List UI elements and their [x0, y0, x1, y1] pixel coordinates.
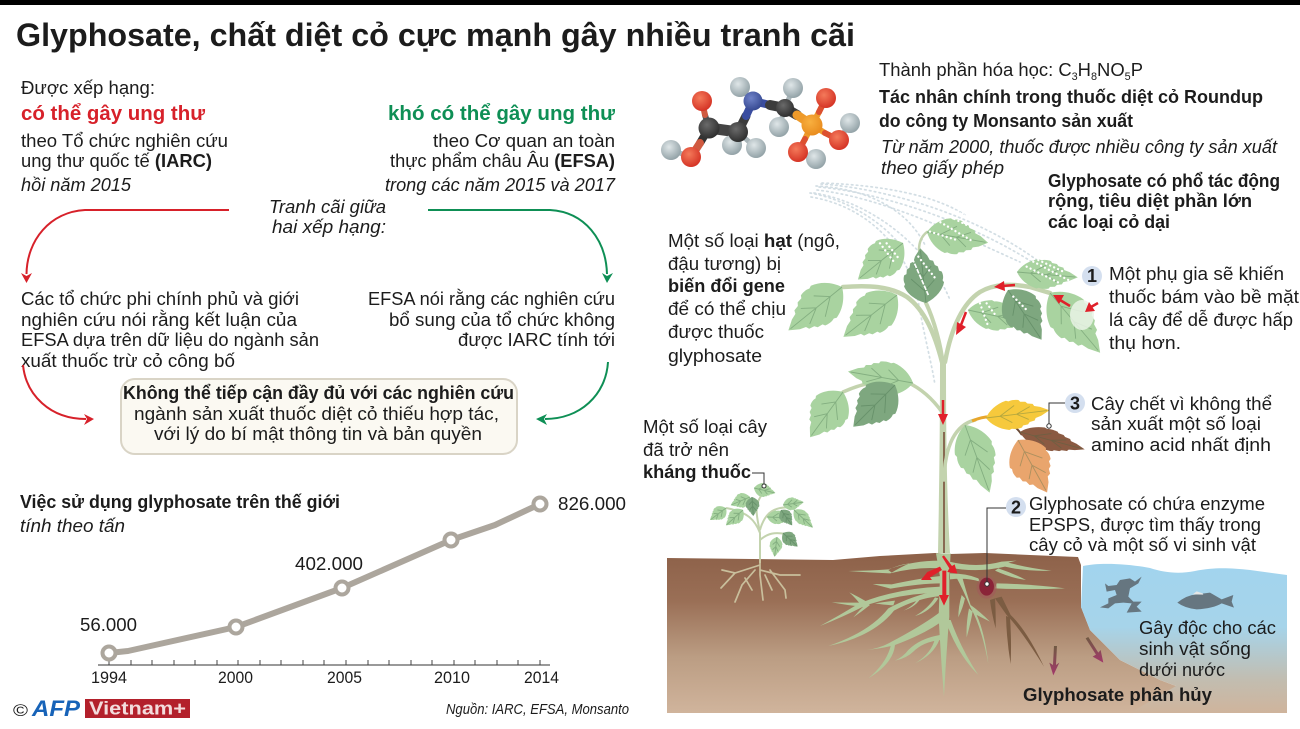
- text: NGO argument: nghiên cứu nói rằng kết luận của: [21, 309, 298, 330]
- spray on leaves: [880, 212, 1068, 327]
- step 3: amino acid nhất định: [1091, 434, 1271, 455]
- step 2: 2: [1011, 498, 1021, 518]
- step 1: lá cây để dễ được hấp: [1109, 309, 1293, 330]
- step 2: [985, 493, 1265, 586]
- line chart: 826.000: [558, 493, 626, 514]
- text: NGO argument: EFSA dựa trên dữ liệu do ngành sản: [21, 329, 319, 350]
- root damage spot: [977, 576, 997, 599]
- text: chemical description: do công ty Monsanto sản xuất: [879, 110, 1133, 131]
- callout box: với lý do bí mật thông tin và bản quyền: [154, 423, 482, 444]
- text: seeds: biến đổi gene: [668, 275, 785, 296]
- text: chemical description: 5: [1125, 71, 1131, 83]
- text: resistant plants: Một số loại cây: [643, 416, 768, 437]
- text: seeds: [668, 230, 840, 366]
- callout box: [121, 379, 517, 454]
- text: chemical description: Tác nhân chính trong thuốc diệt cỏ Roundup: [879, 86, 1263, 107]
- arrow: green to box: [536, 362, 608, 425]
- panel: ranking left: theo Tổ chức nghiên cứu: [21, 130, 228, 151]
- step 3: 3: [1070, 394, 1080, 414]
- fish: [1177, 591, 1234, 609]
- panel: ranking right: thực phẩm châu Âu (EFSA): [390, 150, 615, 171]
- step 1: thuốc bám vào bề mặt: [1109, 286, 1300, 307]
- line chart: 56.000: [80, 614, 137, 635]
- text: seeds: glyphosate: [668, 345, 762, 366]
- text: seeds: được thuốc: [668, 321, 764, 342]
- text: NGO argument: Các tổ chức phi chính phủ và giới: [21, 288, 299, 309]
- footer logos: ©: [13, 701, 29, 720]
- arrow: green to EFSA text: [428, 210, 613, 283]
- step 3: Cây chết vì không thể: [1091, 393, 1272, 414]
- panel: ranking right: trong các năm 2015 và 2017: [385, 174, 616, 195]
- text: decomposition: Glyphosate phân hủy: [1023, 684, 1213, 705]
- line chart: 2010: [434, 669, 470, 687]
- text: EFSA argument: [368, 288, 615, 350]
- text: resistant plants: kháng thuốc: [643, 461, 751, 482]
- red arrows: translocation: [921, 281, 1098, 606]
- text: broad spectrum: các loại cỏ dại: [1048, 211, 1170, 232]
- text: seeds: đậu tương) bị: [668, 253, 781, 274]
- controversy label: [269, 196, 386, 237]
- text: EFSA argument: được IARC tính tới: [458, 329, 615, 350]
- text: chemical description: Từ năm 2000, thuốc được nhiều công ty sản xuất: [881, 136, 1278, 157]
- text: EFSA argument: EFSA nói rằng các nghiên cứu: [368, 288, 615, 309]
- text: NGO argument: xuất thuốc trừ cỏ công bố: [21, 350, 236, 371]
- droplet on leaf: [1070, 300, 1094, 330]
- panel: ranking left: Được xếp hạng:: [21, 77, 155, 98]
- leaves: dying: [984, 396, 1088, 502]
- text: chemical description: P: [1131, 59, 1143, 80]
- line chart: 2014: [524, 669, 559, 687]
- text: resistant plants: [643, 416, 768, 488]
- arrow: red to box: [23, 365, 94, 425]
- footer logos: AFP: [31, 696, 80, 721]
- source: Nguồn: IARC, EFSA, Monsanto: [446, 702, 629, 718]
- panel: ranking left: hồi năm 2015: [21, 174, 132, 195]
- top black bar: [0, 0, 1300, 5]
- chart heading: Việc sử dụng glyphosate trên thế giới: [20, 491, 340, 512]
- text: aquatic toxicity: dưới nước: [1139, 659, 1225, 680]
- panel: ranking right: theo Cơ quan an toàn: [433, 130, 615, 151]
- molecule: [661, 77, 860, 169]
- step 3: sản xuất một số loại: [1091, 413, 1261, 434]
- water: [1081, 564, 1287, 713]
- controversy label: hai xếp hạng:: [272, 216, 386, 237]
- text: aquatic toxicity: [1139, 617, 1276, 680]
- step 2: Glyphosate có chứa enzyme: [1029, 493, 1265, 514]
- text: seeds: Một số loại hạt (ngô,: [668, 230, 840, 251]
- panel: ranking right: khó có thể gây ung thư: [388, 102, 615, 125]
- roots: main plant: [820, 553, 1065, 697]
- line chart: 2000: [218, 669, 253, 687]
- text: chemical description: NO: [1097, 59, 1125, 80]
- text: broad spectrum: Glyphosate có phổ tác động: [1048, 170, 1280, 191]
- callout box: ngành sản xuất thuốc diệt cỏ thiếu hợp tác,: [134, 403, 499, 424]
- step 1: [1082, 263, 1300, 353]
- text: chemical description: 3: [1072, 71, 1078, 83]
- step 1: Một phụ gia sẽ khiến: [1109, 263, 1284, 284]
- text: EFSA argument: bổ sung của tổ chức không: [389, 309, 615, 330]
- footer logos: [13, 696, 190, 721]
- text: broad spectrum: rộng, tiêu diệt phần lớn: [1048, 190, 1252, 211]
- text: chemical description: 8: [1091, 71, 1097, 83]
- step 3: [1047, 393, 1272, 455]
- line chart: 2005: [327, 669, 362, 687]
- text: resistant plants: đã trở nên: [643, 439, 729, 460]
- step 2: cây cỏ và một số vi sinh vật: [1029, 534, 1257, 555]
- frog: [1100, 577, 1142, 613]
- panel: ranking left: có thể gây ung thư: [21, 102, 205, 125]
- controversy label: Tranh cãi giữa: [269, 196, 386, 217]
- line chart: [80, 493, 626, 687]
- chart heading: [20, 491, 340, 536]
- step 1: thụ hơn.: [1109, 332, 1181, 353]
- small plant roots: [721, 560, 800, 602]
- soil: [667, 553, 1287, 713]
- text: chemical description: theo giấy phép: [881, 157, 1004, 178]
- panel: ranking left: [21, 77, 228, 195]
- footer logos: Vietnam+: [89, 698, 186, 718]
- line chart: 402.000: [295, 553, 363, 574]
- chart heading: tính theo tấn: [20, 515, 125, 536]
- text: aquatic toxicity: sinh vật sống: [1139, 638, 1251, 659]
- text: broad spectrum: [1048, 170, 1280, 232]
- small plant: [706, 481, 818, 563]
- dead roots: [990, 597, 1044, 667]
- step 2: EPSPS, được tìm thấy trong: [1029, 514, 1261, 535]
- text: chemical description: Thành phần hóa học: C: [879, 59, 1074, 80]
- panel: ranking left: ung thư quốc tế (IARC): [21, 150, 212, 171]
- text: seeds: để có thể chịu: [668, 298, 786, 319]
- text: NGO argument: [21, 288, 319, 371]
- text: chemical description: H: [1078, 59, 1091, 80]
- callout box: Không thể tiếp cận đầy đủ với các nghiên cứu: [123, 382, 514, 403]
- panel: ranking right: [385, 102, 616, 195]
- step 1: 1: [1087, 266, 1097, 286]
- title: Glyphosate, chất diệt cỏ cực mạnh gây nhiều tranh cãi: [16, 17, 855, 53]
- text: aquatic toxicity: Gây độc cho các: [1139, 617, 1276, 638]
- purple arrows: breakdown: [1049, 637, 1103, 675]
- text: chemical description: [879, 59, 1278, 178]
- leaves: main plant: [775, 215, 1117, 499]
- arrow: red to NGO text: [21, 210, 229, 283]
- spray droplets: [810, 183, 1045, 385]
- plant stems: [843, 232, 1050, 553]
- line chart: 1994: [91, 669, 127, 687]
